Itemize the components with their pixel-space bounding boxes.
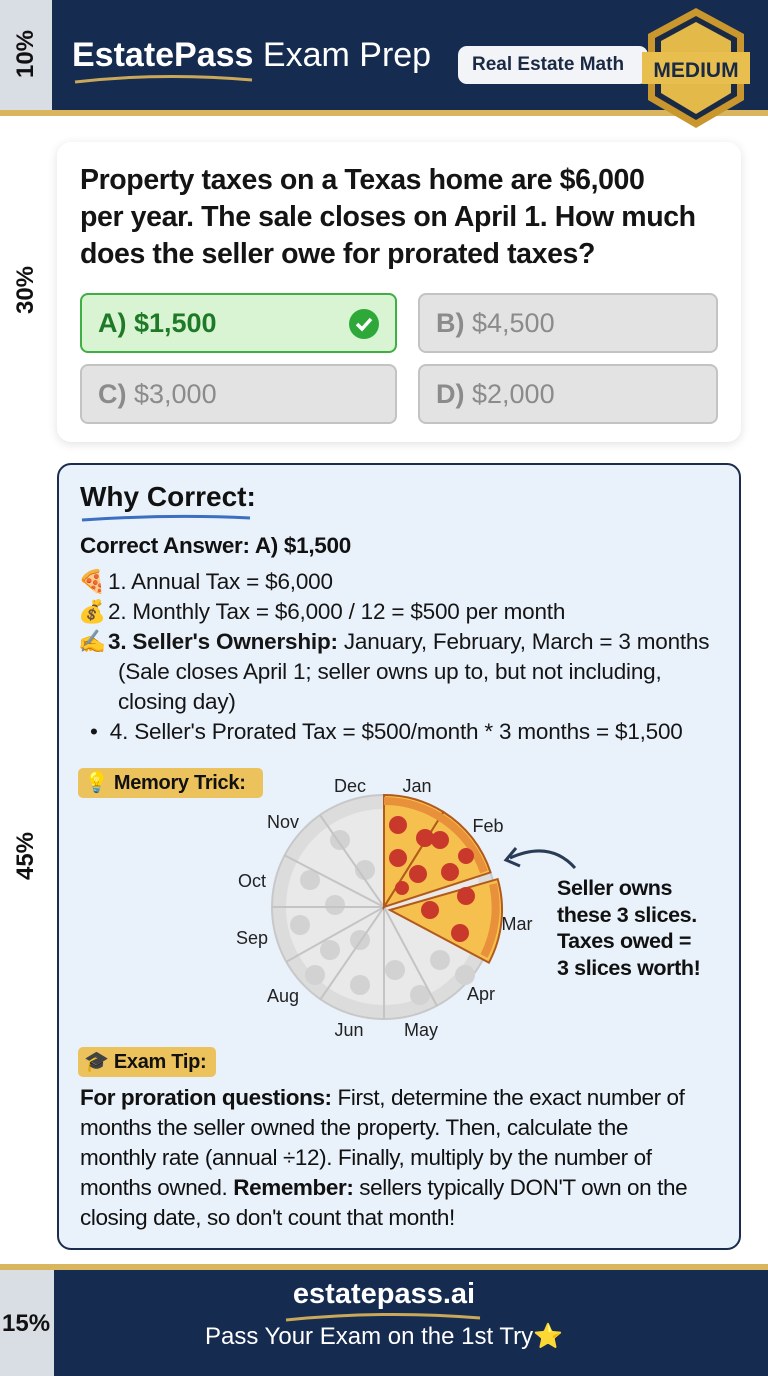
question text: does the seller owe for prorated taxes? xyxy=(80,238,595,270)
steps: 2. Monthly Tax = $6,000 / 12 = $500 per month xyxy=(108,599,565,624)
exam tip text xyxy=(80,1085,687,1230)
arrow xyxy=(510,851,575,868)
chart: pizza months: May xyxy=(404,1020,438,1040)
pill: Exam Tip xyxy=(78,1047,216,1077)
option D xyxy=(418,364,718,424)
steps: closing day) xyxy=(118,689,236,714)
callout: seller owns: 3 slices worth! xyxy=(557,956,700,980)
footer band xyxy=(0,1264,768,1376)
chart: pizza months: Sep xyxy=(236,928,268,948)
option B: B) $4,500 xyxy=(436,308,555,338)
chart: pizza months: Mar xyxy=(502,914,533,934)
chart: pizza months: Oct xyxy=(238,871,266,891)
badge: MEDIUM xyxy=(642,8,750,128)
chart: pizza months: Aug xyxy=(267,986,299,1006)
callout: seller owns: Seller owns xyxy=(557,876,672,900)
exam tip text: months the seller owned the property. Then, calculate the xyxy=(80,1115,628,1140)
exam tip text: closing date, so don't count that month! xyxy=(80,1205,455,1230)
steps: 1. Annual Tax = $6,000 xyxy=(108,569,333,594)
label: 10%: 10% xyxy=(12,30,39,78)
icon: check xyxy=(349,309,379,339)
correct answer: Correct Answer: A) $1,500 xyxy=(80,533,351,558)
pill: Exam Tip: 🎓 Exam Tip: xyxy=(84,1051,206,1073)
badge: MEDIUM: MEDIUM xyxy=(653,59,739,82)
title: EstatePass Exam Prep xyxy=(72,36,431,74)
exam tip text: monthly rate (annual ÷12). Finally, multiply by the number of xyxy=(80,1145,652,1170)
callout: seller owns xyxy=(557,876,700,980)
option C: C) $3,000 xyxy=(98,379,217,409)
exam tip text: months owned. Remember: sellers typically DON'T own on the xyxy=(80,1175,687,1200)
callout: seller owns: Taxes owed = xyxy=(557,929,691,953)
option C xyxy=(80,364,397,424)
option A xyxy=(80,293,397,353)
question text xyxy=(80,164,696,270)
callout: seller owns: these 3 slices. xyxy=(557,902,697,926)
panel: explanation xyxy=(57,463,741,1250)
chart: pizza months: Apr xyxy=(467,984,495,1004)
chart: pizza months: Feb xyxy=(472,816,504,836)
label: 15%: 15% xyxy=(2,1310,50,1337)
steps: • 4. Seller's Prorated Tax = $500/month * 3 months = $1,500 xyxy=(90,719,683,744)
pill: Memory Trick xyxy=(78,768,263,798)
steps: 3. Seller's Ownership: January, February, March = 3 months xyxy=(108,629,709,654)
steps: (Sale closes April 1; seller owns up to, but not including, xyxy=(118,659,662,684)
pill: Real Estate Math: Real Estate Math xyxy=(472,54,624,75)
pill: Memory Trick: 💡 Memory Trick: xyxy=(84,772,246,794)
chart: pizza months: Jun xyxy=(334,1020,364,1040)
exam tip text: For proration questions: First, determine the exact number of xyxy=(80,1085,685,1110)
question text: per year. The sale closes on April 1. How much xyxy=(80,201,696,233)
orange slices xyxy=(384,795,443,907)
steps: 💰 xyxy=(78,599,106,624)
option D: D) $2,000 xyxy=(436,379,555,409)
chart: pizza months: Dec xyxy=(334,776,366,796)
chart: pizza months: Nov xyxy=(267,812,299,832)
option B xyxy=(418,293,718,353)
label: 45%: 45% xyxy=(12,832,39,880)
footer tagline: Pass Your Exam on the 1st Try⭐ xyxy=(205,1323,563,1350)
title underline xyxy=(74,75,252,84)
question card xyxy=(57,142,741,442)
steps: ✍ xyxy=(78,629,106,654)
chart: pizza months: Jan xyxy=(402,776,432,796)
footer brand: estatepass.ai xyxy=(293,1278,475,1310)
pill: Real Estate Math xyxy=(458,46,648,84)
chart: pizza months xyxy=(236,776,576,1040)
heading: Why Correct: Why Correct: xyxy=(80,481,256,512)
steps xyxy=(78,568,709,744)
header band xyxy=(0,0,768,128)
question text: Property taxes on a Texas home are $6,000 xyxy=(80,164,644,196)
label: 30%: 30% xyxy=(12,266,39,314)
steps: 🍕 xyxy=(78,569,106,594)
option A: A) $1,500 xyxy=(98,308,217,338)
